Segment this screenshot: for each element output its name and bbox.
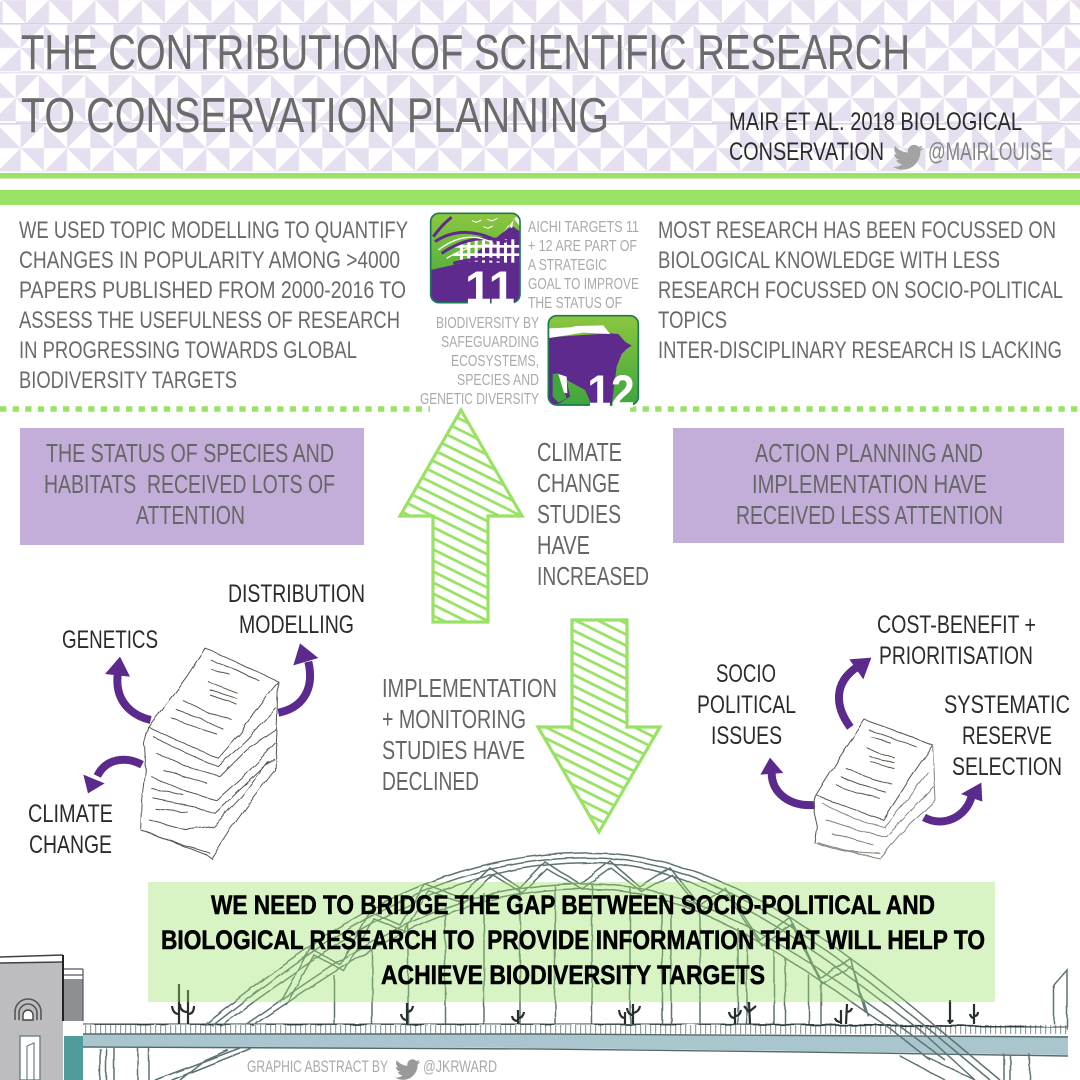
panel: conclusion callout: WE NEED TO BRIDGE THE GAP BETWEEN SOCIO-POLITICAL AND <box>211 890 935 920</box>
labels: large stack topics: CLIMATE <box>28 800 113 828</box>
arch chords <box>100 853 1067 1080</box>
arrow: down, implementation studies declined <box>538 620 660 832</box>
text block: Aichi targets explanation: A STRATEGIC <box>528 257 607 274</box>
text block: method summary <box>19 217 408 394</box>
text block: Aichi targets explanation <box>420 219 639 408</box>
text block: implementation studies: IMPLEMENTATION <box>382 673 557 703</box>
icon: Aichi target 11: 11 <box>465 261 515 313</box>
text block: method summary: PAPERS PUBLISHED FROM 2000-2016 TO <box>19 277 406 304</box>
panel: conclusion callout: ACHIEVE BIODIVERSITY TARGETS <box>381 960 765 990</box>
building at left of bridge <box>0 955 83 1080</box>
labels: large stack topics: CHANGE <box>29 831 112 859</box>
panel: action planning <box>673 428 1064 543</box>
labels: large stack topics: MODELLING <box>239 611 354 639</box>
text block: Aichi targets explanation: GENETIC DIVERSITY <box>420 391 539 408</box>
text block: climate change studies: STUDIES <box>537 499 621 529</box>
panel: action planning: ACTION PLANNING AND <box>755 438 983 468</box>
labels: large stack topics <box>28 580 365 859</box>
icon: twitter bird <box>395 1059 420 1080</box>
text block: Aichi targets explanation: + 12 ARE PART OF <box>528 238 637 255</box>
text block: climate change studies <box>537 437 649 591</box>
text block: main finding <box>658 217 1063 364</box>
citation and author handle <box>729 108 1053 170</box>
illustration: large paper stack with arrows <box>83 643 318 858</box>
title <box>21 26 910 143</box>
labels: small stack topics: POLITICAL <box>697 691 796 719</box>
text block: Aichi targets explanation: THE STATUS OF <box>528 295 622 312</box>
text block: Aichi targets explanation: AICHI TARGETS 11 <box>528 219 639 236</box>
text block: Aichi targets explanation: GOAL TO IMPROVE <box>528 276 639 293</box>
text block: climate change studies: CLIMATE <box>537 437 622 467</box>
text block: Aichi targets explanation: ECOSYSTEMS, <box>451 353 539 370</box>
text block: implementation studies: STUDIES HAVE <box>382 735 525 765</box>
hangers <box>334 884 821 1024</box>
icon: twitter bird <box>893 145 923 170</box>
panel: species and habitats <box>20 428 364 545</box>
arrow: up, climate change studies increased <box>400 410 522 622</box>
labels: small stack topics: ISSUES <box>711 722 782 750</box>
text block: implementation studies <box>382 673 557 796</box>
illustration: small paper stack with arrows <box>760 658 982 858</box>
title: TO CONSERVATION PLANNING <box>21 89 609 143</box>
text block: method summary: CHANGES IN POPULARITY AMONG >4000 <box>19 247 400 274</box>
icon: Aichi target 11 <box>431 213 520 313</box>
footer credit: GRAPHIC ABSTRACT BY <box>247 1058 388 1076</box>
text block: Aichi targets explanation: BIODIVERSITY BY <box>436 315 539 332</box>
panel: species and habitats: ATTENTION <box>136 500 245 530</box>
citation and author handle: CONSERVATION <box>729 138 884 166</box>
text block: method summary: IN PROGRESSING TOWARDS GLOBAL <box>19 337 357 364</box>
deck and railing <box>83 1024 1068 1056</box>
text block: climate change studies: CHANGE <box>537 468 620 498</box>
text block: Aichi targets explanation: SAFEGUARDING <box>441 334 539 351</box>
text block: method summary: BIODIVERSITY TARGETS <box>19 367 237 394</box>
text block: climate change studies: HAVE <box>537 530 590 560</box>
panel: conclusion callout <box>148 882 995 1002</box>
illustration: Tyne bridge sketch <box>83 853 1068 1080</box>
text block: Aichi targets explanation: SPECIES AND <box>457 372 539 389</box>
labels: small stack topics <box>697 611 1070 781</box>
panel: species and habitats: THE STATUS OF SPECIES AND <box>46 438 334 468</box>
text block: climate change studies: INCREASED <box>537 561 649 591</box>
labels: small stack topics: SOCIO <box>716 660 776 688</box>
text block: method summary: ASSESS THE USEFULNESS OF RESEARCH <box>19 307 400 334</box>
labels: small stack topics: COST-BENEFIT + <box>877 611 1036 639</box>
icon: Aichi target 12 <box>548 316 638 417</box>
cacti <box>172 984 978 1024</box>
text block: method summary: WE USED TOPIC MODELLING TO QUANTIFY <box>19 217 408 244</box>
panel: species and habitats: HABITATS RECEIVED LOTS OF <box>44 469 335 499</box>
dotted divider <box>0 406 1080 412</box>
text block: main finding: TOPICS <box>658 307 727 334</box>
labels: small stack topics: PRIORITISATION <box>879 642 1033 670</box>
footer credit <box>244 1056 500 1080</box>
labels: large stack topics: DISTRIBUTION <box>228 580 365 608</box>
header geometric pattern background <box>0 0 1080 172</box>
text block: implementation studies: + MONITORING <box>382 704 526 734</box>
icon: Aichi target 12: 12 <box>587 365 635 417</box>
green header divider bars <box>0 173 1080 205</box>
text block: implementation studies: DECLINED <box>382 766 479 796</box>
footer credit: @JKRWARD <box>423 1058 497 1076</box>
labels: small stack topics: RESERVE <box>962 722 1052 750</box>
panel: action planning: IMPLEMENTATION HAVE <box>752 469 987 499</box>
labels: large stack topics: GENETICS <box>62 626 158 654</box>
